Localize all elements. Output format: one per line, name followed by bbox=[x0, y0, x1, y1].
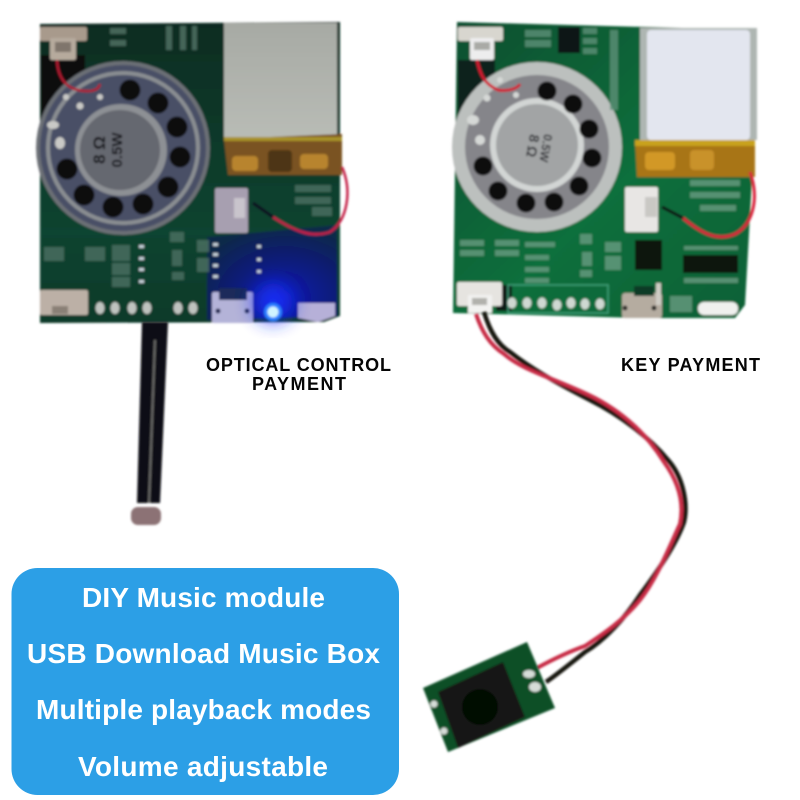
label: key payment: KEY PAYMENT bbox=[621, 355, 760, 375]
cable pair bbox=[137, 322, 168, 503]
IC one bbox=[635, 240, 662, 270]
feature list: Volume adjustable bbox=[78, 751, 328, 782]
battery black wire bbox=[662, 207, 683, 218]
small silk components bbox=[44, 185, 332, 287]
speaker rating print: 0.5W bbox=[109, 132, 126, 168]
button solder pads bbox=[430, 670, 541, 734]
battery gold tape bbox=[224, 134, 342, 175]
speaker solder joints bbox=[47, 94, 103, 149]
board: key module bbox=[452, 22, 757, 318]
battery silver body bbox=[224, 23, 337, 139]
dark shade behind speaker wire bbox=[41, 55, 85, 170]
sensor cable bbox=[131, 322, 168, 525]
speaker rating print bbox=[522, 131, 555, 164]
dark shade near bottom connector bbox=[496, 285, 512, 311]
battery red wire bbox=[273, 167, 347, 234]
battery gold tape right bbox=[635, 140, 755, 177]
speaker wire red right bbox=[477, 60, 520, 91]
dark shade near top connector bbox=[458, 60, 495, 130]
speaker solder joints bbox=[467, 77, 519, 145]
top left connector bbox=[458, 27, 503, 60]
speaker rating print: 0.5W bbox=[536, 133, 555, 164]
top left connector bbox=[40, 27, 87, 60]
terminal outline bbox=[508, 285, 608, 313]
mid connector white bbox=[625, 187, 658, 232]
battery silver frame bbox=[640, 28, 757, 140]
PCB right bbox=[453, 22, 757, 318]
label: optical control payment bbox=[206, 355, 391, 394]
speaker right bbox=[452, 62, 622, 232]
feature list bbox=[27, 582, 380, 782]
black chip top bbox=[558, 27, 580, 53]
terminal pads bbox=[96, 302, 198, 314]
white smd pads bbox=[139, 243, 261, 283]
battery white face bbox=[647, 30, 750, 140]
speaker wire red bbox=[57, 60, 100, 91]
panel background bbox=[12, 568, 399, 795]
blue LED bbox=[264, 303, 282, 321]
red wire bbox=[476, 314, 681, 668]
silk and small components bbox=[460, 180, 740, 312]
button PCB bbox=[423, 642, 555, 752]
button plunger bbox=[462, 689, 498, 725]
terminal pads bbox=[508, 298, 604, 310]
blue lit PCB area bbox=[207, 225, 337, 320]
PCB left bbox=[40, 22, 340, 323]
feature list: Multiple playback modes bbox=[36, 694, 371, 725]
speaker rating print: 8 Ω bbox=[523, 133, 543, 159]
feature list: DIY Music module bbox=[82, 582, 325, 613]
button body bbox=[438, 662, 525, 748]
push button module bbox=[423, 642, 555, 752]
blue LED glow bbox=[253, 282, 293, 322]
black wire bbox=[484, 312, 685, 682]
label: optical control payment: PAYMENT bbox=[252, 374, 346, 394]
top silk components bbox=[525, 28, 618, 110]
switch right bbox=[698, 302, 738, 315]
feature list: USB Download Music Box bbox=[27, 638, 380, 669]
speaker holes bbox=[474, 82, 602, 212]
key cable bbox=[476, 312, 685, 682]
light sensor tip bbox=[131, 507, 161, 525]
bottom left connector bbox=[40, 290, 88, 315]
speaker bbox=[36, 61, 210, 235]
speaker rating print bbox=[90, 132, 126, 168]
battery red wire bbox=[683, 172, 754, 237]
cable highlight bbox=[148, 340, 156, 503]
USB socket right bbox=[622, 283, 662, 318]
speaker holes bbox=[56, 80, 190, 218]
battery tape highlights bbox=[224, 137, 342, 172]
board: optical control module bbox=[36, 22, 347, 323]
mid connector bbox=[215, 188, 248, 233]
USB socket left bbox=[212, 288, 253, 323]
panel: features bbox=[12, 568, 399, 795]
switch left bbox=[298, 303, 335, 322]
battery black wire bbox=[253, 203, 273, 217]
IC two bbox=[683, 255, 738, 273]
label: optical control payment: OPTICAL CONTROL bbox=[206, 355, 391, 375]
top silk components bbox=[110, 26, 197, 50]
speaker rating print: 8 Ω bbox=[90, 136, 109, 164]
bottom left connector white bbox=[457, 282, 502, 313]
